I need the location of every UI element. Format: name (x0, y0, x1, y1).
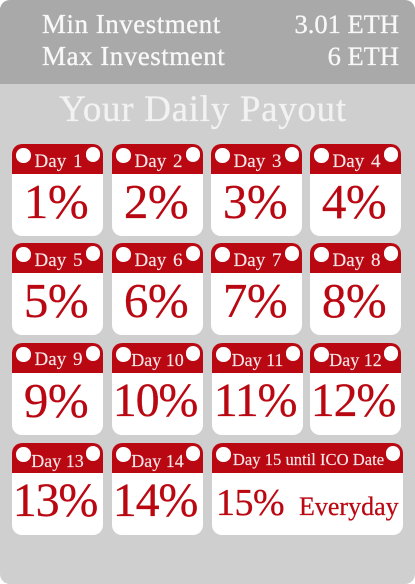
card: day 15 until ICO date (212, 443, 403, 535)
card: day 1: Day 1 (35, 151, 82, 172)
card: day 15 until ICO date: Everyday (299, 492, 399, 521)
card: day 11: Day 11 (232, 350, 283, 370)
max investment value: 6 ETH (328, 41, 399, 71)
card: day 3: Day 3 (234, 151, 281, 172)
card: day 9: Day 9 (35, 349, 82, 370)
card: day 12 (310, 343, 401, 435)
card: day 12: 12% (311, 374, 395, 427)
card: day 5: Day 5 (35, 250, 82, 271)
card: day 1 (12, 144, 103, 236)
card: day 9: 9% (24, 373, 88, 428)
card: day 4: 4% (322, 174, 386, 229)
card: day 14: 14% (113, 474, 197, 527)
card: day 6: 6% (124, 273, 188, 328)
card: day 5 (12, 243, 103, 335)
card: day 7 (211, 243, 302, 335)
card: day 1: 1% (24, 174, 88, 229)
card: day 2: 2% (124, 174, 188, 229)
card: day 5: 5% (24, 273, 88, 328)
min investment label: Min Investment (42, 9, 221, 39)
card: day 2: Day 2 (135, 151, 182, 172)
card: day 6 (112, 243, 203, 335)
card: day 7: Day 7 (234, 250, 281, 271)
card: day 4: Day 4 (333, 151, 380, 172)
card: day 8: Day 8 (333, 250, 380, 271)
card: day 3: 3% (223, 174, 287, 229)
card: day 13 (12, 443, 103, 535)
card: day 7: 7% (223, 273, 287, 328)
card: day 8: 8% (322, 273, 386, 328)
card: day 10: 10% (113, 374, 197, 427)
min investment value: 3.01 ETH (294, 9, 399, 39)
card: day 3 (211, 144, 302, 236)
card: day 2 (112, 144, 203, 236)
card: day 15 until ICO date: 15% (216, 482, 284, 524)
card: day 8 (310, 243, 401, 335)
card: day 14: Day 14 (131, 451, 184, 471)
card: day 6: Day 6 (135, 250, 182, 271)
card: day 13: 13% (13, 474, 97, 527)
card: day 11 (212, 343, 303, 435)
card: day 13: Day 13 (31, 451, 84, 471)
investment limits header (0, 0, 415, 84)
card: day 10: Day 10 (131, 350, 184, 370)
card: day 14 (112, 443, 203, 535)
card: day 10 (112, 343, 203, 435)
card: day 9 (12, 343, 103, 435)
title: Your Daily Payout (59, 89, 347, 130)
card: day 15 until ICO date: Day 15 until ICO Date (233, 450, 384, 469)
card: day 4 (310, 144, 401, 236)
max investment label: Max Investment (42, 41, 225, 71)
card: day 11: 11% (214, 374, 296, 427)
card: day 12: Day 12 (329, 350, 382, 370)
